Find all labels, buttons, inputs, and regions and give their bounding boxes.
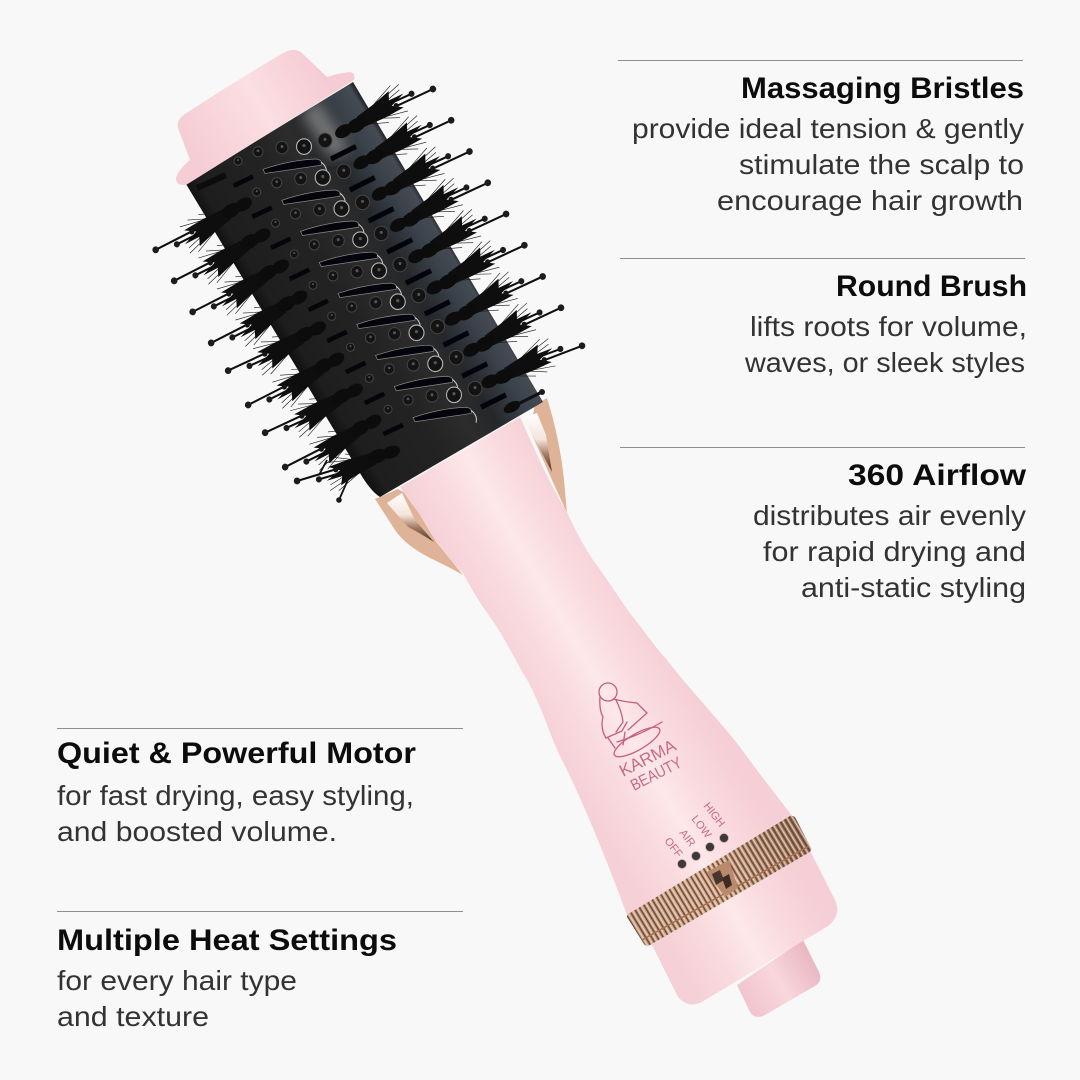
feature: Multiple Heat Settings: and texture xyxy=(57,1001,209,1032)
feature: Round Brush xyxy=(620,258,1027,378)
feature: Round Brush: lifts roots for volume, xyxy=(750,311,1027,342)
top cap xyxy=(176,50,354,185)
logo figure xyxy=(599,683,664,762)
feature: Massaging Bristles: provide ideal tension & gently xyxy=(632,113,1024,144)
short bristles xyxy=(197,175,545,503)
bristles: right side xyxy=(328,66,589,399)
feature: Quiet & Powerful Motor: and boosted volume. xyxy=(57,816,337,847)
feature: Multiple Heat Settings: for every hair type xyxy=(57,965,297,996)
feature: Massaging Bristles: Massaging Bristles xyxy=(741,72,1024,105)
feature: Quiet & Powerful Motor: Quiet & Powerful Motor xyxy=(57,737,416,770)
feature: Round Brush: Round Brush xyxy=(836,270,1027,303)
setting labels: LOW xyxy=(689,813,714,841)
logo text: KARMA BEAUTY: KARMA xyxy=(616,736,680,781)
feature: 360 Airflow: anti-static styling xyxy=(801,572,1026,603)
feature: Massaging Bristles: stimulate the scalp to xyxy=(739,149,1024,180)
copper brace: right xyxy=(523,398,567,513)
bristles: left side xyxy=(148,186,406,504)
feature: Massaging Bristles: encourage hair growth xyxy=(717,185,1023,216)
copper brace: left xyxy=(375,489,463,575)
barrel xyxy=(186,82,543,497)
feature: 360 Airflow: distributes air evenly xyxy=(753,500,1026,531)
feature: 360 Airflow xyxy=(620,448,1027,603)
copper dial ring xyxy=(627,816,811,946)
setting labels: AIR xyxy=(677,827,697,849)
feature: Round Brush: waves, or sleek styles xyxy=(744,347,1025,378)
handle xyxy=(400,417,837,1005)
barrel slots, vents and bristles xyxy=(148,66,589,504)
feature: Quiet & Powerful Motor xyxy=(57,728,463,847)
indicator lights xyxy=(678,834,728,868)
feature: 360 Airflow: 360 Airflow xyxy=(848,459,1027,492)
feature: Massaging Bristles xyxy=(618,60,1024,216)
barrel highlight xyxy=(300,100,350,160)
feature: Quiet & Powerful Motor: for fast drying, easy styling, xyxy=(57,780,414,811)
nozzle xyxy=(737,940,820,1017)
feature: 360 Airflow: for rapid drying and xyxy=(763,536,1026,567)
feature: Multiple Heat Settings xyxy=(57,912,463,1032)
setting labels: HIGH xyxy=(701,800,727,830)
setting labels: OFF xyxy=(662,835,685,860)
logo text: KARMA BEAUTY: BEAUTY xyxy=(628,754,685,795)
product: hair dryer brush xyxy=(148,50,837,1017)
feature: Multiple Heat Settings: Multiple Heat Settings xyxy=(57,924,397,957)
setting labels xyxy=(662,800,727,860)
barrel slots and vents xyxy=(234,133,506,434)
logo text: KARMA BEAUTY xyxy=(616,736,685,795)
